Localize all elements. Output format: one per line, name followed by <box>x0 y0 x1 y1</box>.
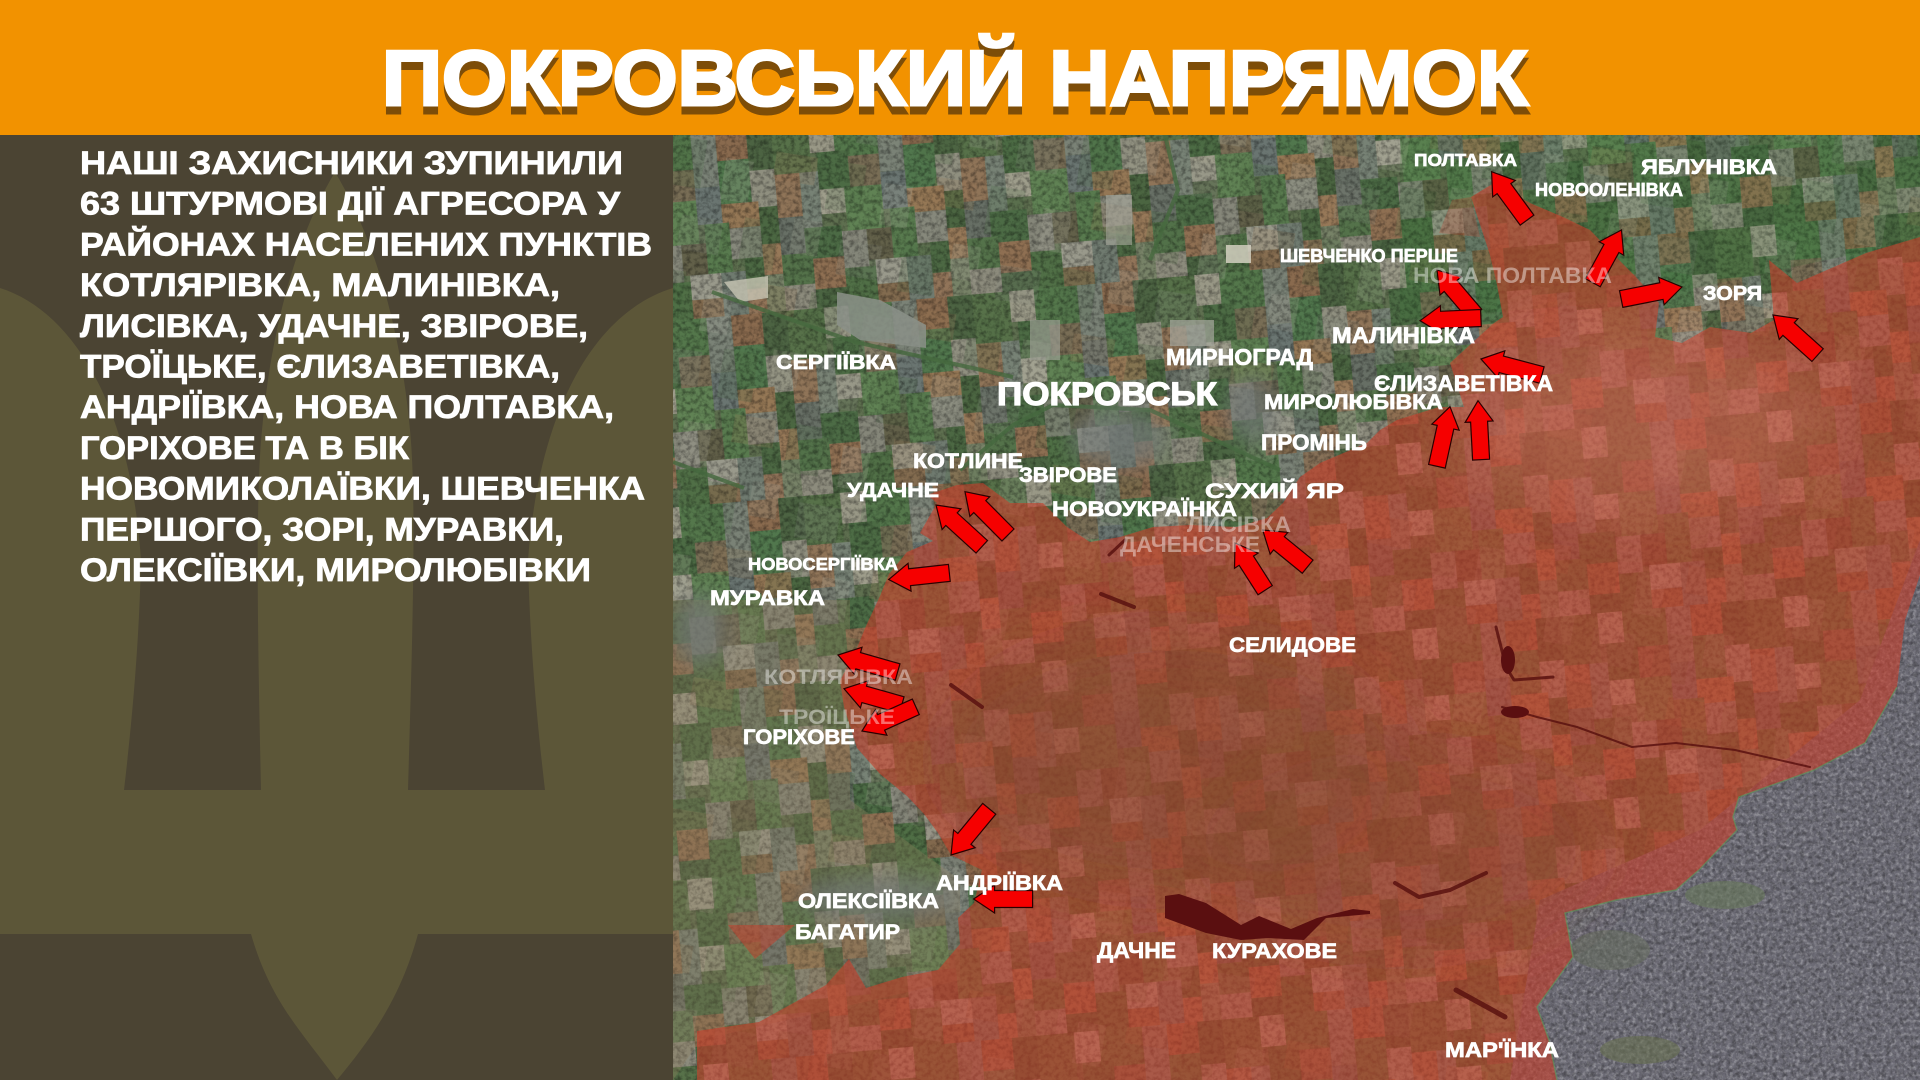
arrow: Лисівка <box>1254 519 1316 578</box>
label: Малинівка: МАЛИНІВКА <box>1332 323 1475 348</box>
map labels <box>710 150 1777 1062</box>
label: Сергіївка: СЕРГІЇВКА <box>776 351 896 374</box>
text block: ТРОЇЦЬКЕ, ЄЛИЗАВЕТІВКА, <box>80 348 560 384</box>
arrow: Зоря west <box>1618 273 1685 313</box>
arrow: Зоря east <box>1764 305 1827 366</box>
label: Покровськ: ПОКРОВСЬК <box>997 376 1218 412</box>
reservoir and rivers <box>951 540 1810 1017</box>
occupied territory <box>697 183 1920 1080</box>
label: Удачне: УДАЧНЕ <box>847 480 939 502</box>
text block: НОВОМИКОЛАЇВКИ, ШЕВЧЕНКА <box>80 471 645 507</box>
header bar <box>0 0 1920 135</box>
border line <box>1537 687 1897 1080</box>
label: Новосергіївка: НОВОСЕРГІЇВКА <box>748 554 898 574</box>
label: Курахове: КУРАХОВЕ <box>1212 940 1337 963</box>
text block <box>80 145 652 588</box>
arrow: Котлине <box>955 482 1018 545</box>
label: Шевченко Перше: ШЕВЧЕНКО ПЕРШЕ <box>1280 246 1458 266</box>
label: Звірове: ЗВІРОВЕ <box>1019 464 1117 487</box>
label: Промінь: ПРОМІНЬ <box>1261 430 1367 455</box>
text block: РАЙОНАХ НАСЕЛЕНИХ ПУНКТІВ <box>80 226 652 262</box>
arrow: Єлизаветівка east <box>1477 345 1545 389</box>
text block: ОЛЕКСІЇВКИ, МИРОЛЮБІВКИ <box>80 552 591 588</box>
label: Мирноград: МИРНОГРАД <box>1166 344 1313 370</box>
arrow: Єлизаветівка south <box>1464 400 1495 460</box>
map <box>673 135 1920 1080</box>
label: Андріївка: АНДРІЇВКА <box>936 872 1063 895</box>
label: Олексіївка: ОЛЕКСІЇВКА <box>798 890 939 913</box>
satellite fields <box>673 135 1920 1080</box>
arrow: Андріївка <box>974 885 1033 913</box>
roads <box>673 135 1280 488</box>
arrow: Новосергіївка <box>887 559 951 593</box>
label: Новоукраїнка: НОВОУКРАЇНКА <box>1052 498 1237 521</box>
label: Зоря: ЗОРЯ <box>1703 283 1762 305</box>
label: Новооленівка: НОВООЛЕНІВКА <box>1535 180 1683 200</box>
occupied wedge <box>728 925 795 959</box>
text block: 63 ШТУРМОВІ ДІЇ АГРЕСОРА У <box>80 186 621 222</box>
urban areas <box>674 376 1276 920</box>
label: Сухий Яр: СУХИЙ ЯР <box>1205 479 1344 503</box>
arrow: Котлярівка <box>834 642 901 685</box>
arrow: Малинівка <box>1419 304 1482 335</box>
arrow: Шевченко Перше <box>1426 261 1486 324</box>
label: Муравка: МУРАВКА <box>710 587 825 610</box>
title: ПОКРОВСЬКИЙ НАПРЯМОК <box>382 34 1528 122</box>
tone variation inside occupied zone <box>940 330 1830 950</box>
pale and grey fields <box>724 195 1251 360</box>
label: Полтавка: ПОЛТАВКА <box>1414 150 1517 170</box>
label: Багатир: БАГАТИР <box>795 921 900 944</box>
text block: АНДРІЇВКА, НОВА ПОЛТАВКА, <box>80 389 614 425</box>
label: Миролюбівка: МИРОЛЮБІВКА <box>1264 391 1443 414</box>
arrow: Даченське <box>1223 535 1277 598</box>
arrow: Горіхове <box>856 694 922 744</box>
greener northeast fields <box>1400 135 1920 320</box>
text block: КОТЛЯРІВКА, МАЛИНІВКА, <box>80 267 560 303</box>
label: Горіхове: ГОРІХОВЕ <box>743 726 855 749</box>
label: Котлине: КОТЛИНЕ <box>913 450 1023 473</box>
label: Котлярівка: КОТЛЯРІВКА <box>764 666 913 689</box>
tan southwest fields <box>673 600 960 1080</box>
label: Даченське: ДАЧЕНСЬКЕ <box>1120 532 1260 557</box>
text block: ПЕРШОГО, ЗОРІ, МУРАВКИ, <box>80 511 564 547</box>
faint wedge north <box>1439 197 1480 237</box>
label: Мар'їнка: МАР'ЇНКА <box>1445 1039 1559 1062</box>
left panel <box>0 135 673 1080</box>
text block: НАШІ ЗАХИСНИКИ ЗУПИНИЛИ <box>80 145 623 181</box>
text block: ЛИСІВКА, УДАЧНЕ, ЗВІРОВЕ, <box>80 308 588 344</box>
trident emblem <box>0 172 673 1080</box>
arrow: Миролюбівка <box>1423 404 1464 469</box>
arrow: Полтавка <box>1480 163 1538 228</box>
arrow: Удачне <box>927 495 991 557</box>
label: Троїцьке: ТРОЇЦЬКЕ <box>779 706 895 729</box>
label: Єлизаветівка: ЄЛИЗАВЕТІВКА <box>1374 371 1553 396</box>
title: ПОКРОВСЬКИЙ НАПРЯМОК <box>382 42 1528 130</box>
arrow: Троїцьке <box>840 675 906 718</box>
arrows <box>834 163 1827 913</box>
label: Яблунівка: ЯБЛУНІВКА <box>1641 156 1777 179</box>
label: Селидове: СЕЛИДОВЕ <box>1229 634 1356 657</box>
text block: ГОРІХОВЕ ТА В БІК <box>80 430 410 466</box>
arrow: south-west <box>940 800 1000 864</box>
city south-east <box>1500 530 1920 1080</box>
label: Дачне: ДАЧНЕ <box>1097 938 1176 963</box>
arrow: Новооленівка <box>1580 223 1634 289</box>
label: Нова Полтавка: НОВА ПОЛТАВКА <box>1413 263 1612 288</box>
label: Лисівка: ЛИСІВКА <box>1187 512 1291 537</box>
